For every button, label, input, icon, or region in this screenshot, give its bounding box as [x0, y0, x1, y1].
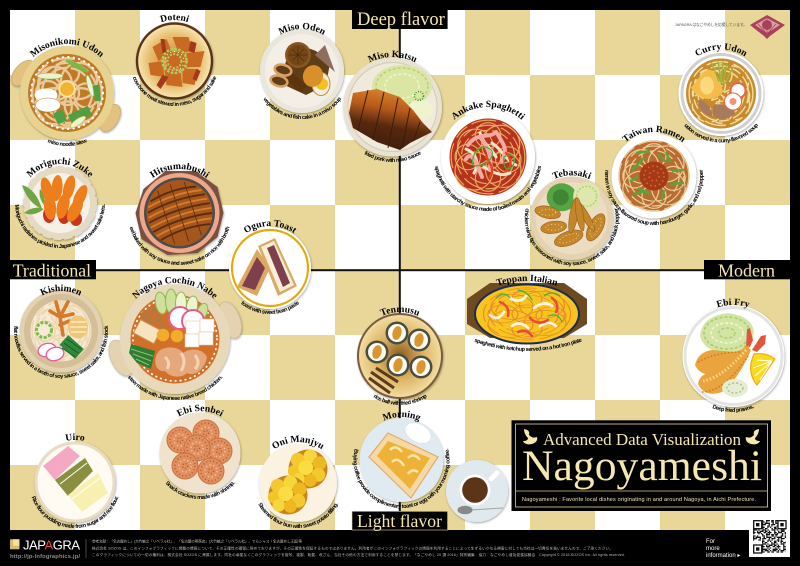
dish: Kishimen: [14, 284, 108, 380]
axis label: Modern: [704, 260, 790, 280]
art: hot pot: [104, 284, 246, 394]
art: chicken wings plate: [530, 177, 613, 260]
name: Curry Udon: [695, 43, 746, 56]
art: shrimp crackers plate: [160, 412, 240, 494]
QR code: [749, 517, 790, 557]
name: Misonikomi Udon: [29, 38, 103, 58]
references and disclaimer: このグラフィックについての一切の権利は、株式会社 SOZOS に帰属します。同社の承諾なくこのグラフィックを複写、複製、転載、改ざん、当社その他の方法で利用することを禁じます。「なごやめし 20 選 2016」特別編集 協力：なごやめし普及促進協議会 Copyright © 2016 SOZOS Inc. All rights reserved.: [92, 552, 625, 557]
heading: Nagoyameshi: Nagoyameshi: [522, 442, 762, 490]
name: Tebasaki: [552, 169, 592, 180]
art: eel over rice: [136, 171, 224, 255]
art: spaghetti plate: [441, 110, 535, 204]
name: Kishimen: [40, 284, 82, 296]
art: coffee cup and saucer: [446, 460, 508, 522]
description: rice ball with fried shrimp: [374, 394, 426, 405]
name: Moriguchi Zuke: [26, 157, 92, 178]
dish: Morning: [352, 410, 510, 524]
art: fried prawns plate: [682, 305, 784, 407]
dish: Taiwan Ramen: [605, 126, 704, 226]
name: Nagoya Cochin Nabe: [132, 276, 216, 299]
axis label: Deep flavor: Deep flavor: [357, 10, 445, 30]
name: Oni Manjyu: [272, 436, 324, 450]
icon: crimson fan logo: [750, 15, 785, 39]
references and disclaimer: [92, 539, 625, 557]
sponsor note: JAPAGRA はなごやめしを応援しています。: [675, 22, 747, 27]
more information prompt: information ▸: [706, 553, 740, 559]
more information prompt: more: [706, 546, 720, 552]
art: flat noodle bowl: [20, 290, 102, 372]
dish: Uiro: [32, 433, 118, 528]
more information prompt: For: [706, 539, 715, 545]
art: ramen bowl: [612, 134, 696, 218]
dish: Nagoya Cochin Nabe: [108, 276, 244, 400]
art: toast with red bean paste: [229, 227, 311, 309]
description: Moriguchi radishes pickled in Japanese and sweet sake lees.: [15, 204, 105, 249]
url: http://jp-infographics.jp/: [10, 554, 80, 560]
dish: Oni Manjyu: [258, 436, 339, 528]
references and disclaimer: 参考文献：「名古屋めし」(大竹敏之「リベラル社」、「名古屋の喫茶店」(大竹敏之「リベラル社」、でらシャス！名古屋めし王国 等: [92, 539, 302, 544]
description: chicken wing tips seasoned with soy sauce, sweet sake, and black pepper: [524, 208, 620, 266]
description: vegetables and fish cake in a miso soup: [264, 97, 341, 119]
dish: Moriguchi Zuke: [15, 157, 105, 249]
subtitle: Nagoyameshi : Favorite local dishes originating in and around Nagoya, in Aichi Prefecture.: [522, 497, 756, 503]
axis label: Light flavor: Light flavor: [357, 511, 442, 531]
name: Hitsumabushi: [149, 162, 210, 178]
dish: Miso Oden: [260, 22, 346, 119]
axis label: Modern: Modern: [718, 260, 775, 280]
description: flat noodles served in a broth of soy sauce, sweet sake, and fish stock: [14, 326, 108, 380]
dish: Tenmusu: [356, 308, 445, 405]
dish: Ebi Senbei: [158, 404, 242, 499]
description: cow bone meat stewed in miso, sugar and sake: [133, 76, 216, 106]
dish: Misonikomi Udon: [10, 38, 123, 146]
icon: golden shachi left: [523, 429, 537, 444]
description: Snack crackers made with shrimp.: [166, 481, 235, 499]
dish: Teppan Italian: [467, 274, 587, 352]
dish: Hitsumabushi: [130, 162, 230, 265]
dish: Curry Udon: [678, 43, 766, 144]
art: curry udon bowl: [678, 51, 764, 136]
description: udon served in a curry-flavored soup: [684, 124, 758, 144]
art: rice balls plate: [357, 313, 443, 399]
description: toast with sweet bean paste: [241, 301, 299, 314]
art: clay pot of miso noodles: [7, 46, 125, 140]
description: fried pork with miso sauce: [364, 151, 421, 162]
name: Uiro: [65, 433, 84, 441]
description: Buying coffee provide complimentary toast or egg with your morning coffee.: [352, 448, 450, 510]
art: pickled radish plate: [22, 167, 96, 239]
name: Miso Oden: [278, 22, 325, 35]
name: Tenmusu: [380, 308, 420, 316]
description: Rice flour pudding made from sugar and rice flour.: [32, 496, 118, 528]
name: Morning: [382, 410, 421, 422]
dish: Ebi Fry: [682, 298, 786, 413]
art: pork cutlet plate: [343, 58, 442, 156]
dish: Ankake Spaghetti: [434, 100, 541, 212]
heading: Advanced Data Visualization: Advanced Data Visualization: [543, 430, 742, 449]
dish: Miso Katsu: [342, 50, 444, 162]
description: spaghetti with starchy sauce made of boiled meats and vegetables: [434, 166, 541, 212]
dish: Doteni: [133, 14, 216, 106]
description: miso noodle stew: [48, 139, 86, 146]
art: toast and egg plate: [360, 418, 444, 502]
axis label: Traditional: Traditional: [13, 260, 91, 280]
name: Ebi Fry: [716, 298, 750, 308]
description: spaghetti with ketchup served on a hot iron plate: [474, 338, 582, 352]
art: stewed meat plate: [136, 22, 213, 100]
art: oden plate: [260, 29, 344, 113]
description: Steamed flour bun with sweet potato filling.: [258, 502, 338, 528]
name: Ogura Toast: [244, 220, 296, 234]
description: stew made with Japanese native breed chicken.: [128, 376, 222, 400]
art: hot iron plate spaghetti: [467, 283, 587, 344]
art: steamed buns plate: [259, 444, 337, 522]
dish: Tebasaki: [524, 169, 620, 266]
name: Ankake Spaghetti: [452, 100, 526, 120]
name: Ebi Senbei: [176, 404, 224, 417]
name: Teppan Italian: [496, 274, 558, 286]
dish: Ogura Toast: [228, 220, 313, 314]
art: rice flour pudding plate: [34, 442, 116, 522]
axis lines: [96, 29, 704, 511]
footer: [10, 517, 790, 560]
name: Miso Katsu: [367, 50, 416, 62]
description: Deep fried prawns.: [712, 404, 754, 413]
name: Taiwan Ramen: [622, 126, 684, 142]
title panel: [512, 420, 771, 511]
name: Doteni: [160, 14, 190, 22]
description: ramen in soy sauce-flavored soup with hamburger, garlic, and red pepper: [605, 170, 704, 226]
icon: golden shachi right: [746, 429, 760, 444]
description: eel baked with soy sauce and sweet sake on rice with broth: [130, 226, 230, 265]
logo: JAPAGRA: JAPAGRA: [23, 538, 80, 552]
references and disclaimer: 株式会社 SOZOS は、このインフォグラフィックに掲載の情報について、その正確性の確保に努めておりますが、その正確性を保証するものではありません。利用者がこのインフォグラフィックの情報を利用することによって生ずるいかなる損害に対しても当社は一切責任を負いませんので、ご了承ください。: [92, 545, 613, 550]
